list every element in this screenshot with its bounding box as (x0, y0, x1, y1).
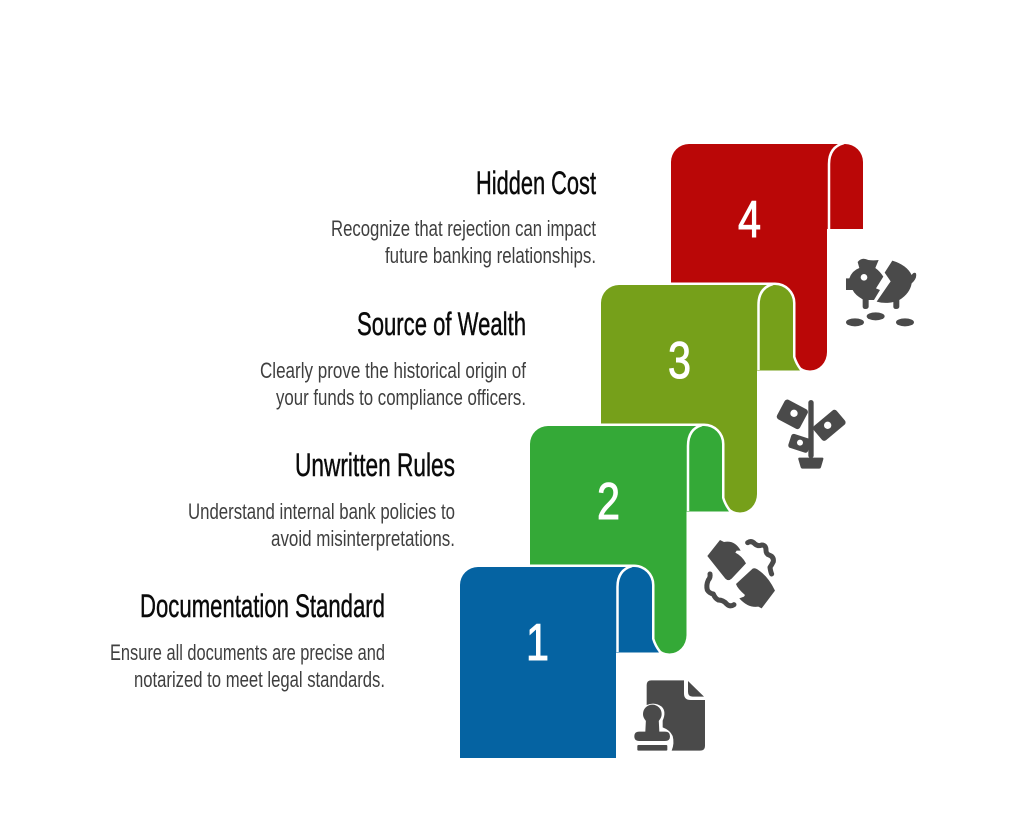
step 3 scroll: 3 (668, 332, 691, 390)
text: Unwritten Rules (188, 447, 455, 551)
icon: broken handshake agreement (707, 540, 775, 608)
text: Hidden Cost: future banking relationships. (385, 243, 596, 268)
text: Documentation Standard (110, 588, 385, 692)
text: Unwritten Rules: avoid misinterpretations. (271, 526, 455, 551)
text: Documentation Standard: notarized to meet legal standards. (134, 667, 385, 692)
text: Unwritten Rules: Understand internal bank policies to (188, 499, 455, 524)
step 4 scroll: 4 (738, 191, 761, 249)
text: Documentation Standard: Documentation Standard (140, 588, 385, 624)
text: Hidden Cost: Hidden Cost (476, 165, 596, 201)
step 3 scroll (601, 284, 800, 512)
icon: broken piggy bank (846, 259, 916, 326)
step 4 scroll (671, 143, 863, 370)
text: Source of Wealth (260, 306, 527, 410)
text: Source of Wealth: Clearly prove the historical origin of (260, 358, 527, 383)
icon: money plant (776, 399, 847, 469)
text: Hidden Cost: Recognize that rejection can impact (331, 216, 596, 241)
step 2 scroll (530, 425, 729, 654)
text: Unwritten Rules: Unwritten Rules (295, 447, 455, 483)
step 1 scroll (460, 566, 659, 758)
step 2 scroll: 2 (597, 473, 620, 531)
icon: notarized document with stamp (634, 680, 705, 751)
text: Documentation Standard: Ensure all documents are precise and (110, 640, 385, 665)
text: Source of Wealth: your funds to compliance officers. (276, 385, 526, 410)
step 1 scroll: 1 (526, 614, 549, 672)
text: Hidden Cost (331, 165, 596, 268)
text: Source of Wealth: Source of Wealth (357, 306, 526, 342)
